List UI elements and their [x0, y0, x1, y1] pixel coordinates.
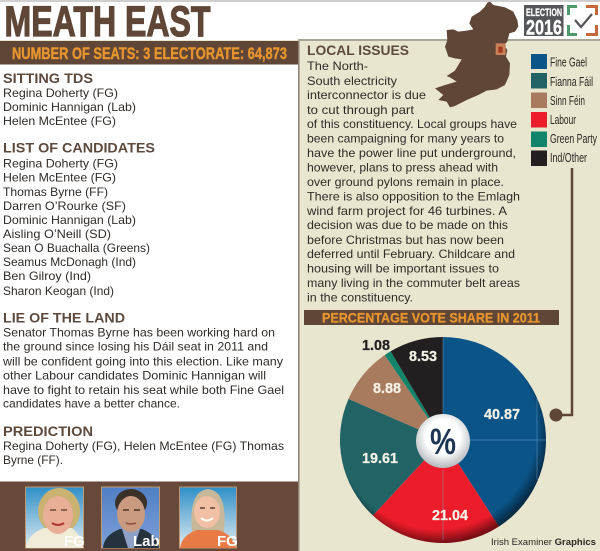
photo: Regina Doherty: FG	[64, 533, 85, 550]
prediction	[3, 424, 284, 467]
local issues: to cut through part	[307, 103, 415, 117]
list of candidates: Aisling O’Neill (SD)	[3, 227, 111, 241]
lie of the land: other Labour candidates Dominic Hannigan will	[3, 368, 266, 382]
local issues: before Christmas but has now been	[307, 233, 504, 247]
pie value labels: 40.87	[484, 407, 520, 423]
lie of the land: Senator Thomas Byrne has been working hard on	[3, 326, 275, 340]
sitting TDs: SITTING TDS	[3, 71, 93, 86]
local issues: LOCAL ISSUES	[307, 43, 409, 58]
local issues: decision was due to be made on this	[307, 218, 508, 232]
top white header strip	[0, 0, 600, 40]
local issues: interconnector is due	[307, 88, 426, 102]
local issues	[306, 43, 520, 305]
local issues: There is also opposition to the Emlagh	[307, 190, 520, 204]
credit: Irish Examiner Graphics	[491, 537, 596, 548]
logo: Election 2016: 2016	[526, 16, 562, 40]
local issues: many living in the commuter belt areas	[307, 276, 520, 290]
seats and electorate bar: NUMBER OF SEATS: 3 ELECTORATE: 64,873	[12, 45, 287, 63]
local issues: South electricity	[307, 74, 397, 88]
local issues: The North-	[307, 59, 368, 73]
logo: Election 2016: ELECTION	[526, 7, 562, 19]
photo strip	[0, 482, 298, 551]
lie of the land: have to fight to retain his seat while both Fine Gael	[3, 383, 284, 397]
local issues: been campaigning for many years to	[307, 132, 504, 146]
photo: Helen McEntee	[180, 487, 238, 550]
pie value labels: 19.61	[362, 451, 398, 467]
lie of the land: candidates have a better chance.	[3, 397, 180, 411]
photo: Dominic Hannigan: Lab	[133, 533, 160, 550]
sitting TDs: Helen McEntee (FG)	[3, 114, 116, 128]
list of candidates	[3, 140, 155, 298]
pie value labels	[362, 338, 520, 524]
list of candidates: LIST OF CANDIDATES	[3, 140, 155, 156]
list of candidates: Thomas Byrne (FF)	[3, 185, 108, 199]
pie centre percent badge	[416, 414, 470, 468]
local issues: deferred until February. Childcare and	[307, 247, 515, 261]
legend	[531, 54, 597, 166]
icon: map of Ireland	[435, 2, 518, 107]
legend connector line	[550, 168, 572, 422]
photo: Dominic Hannigan	[102, 487, 160, 550]
prediction: Byrne (FF).	[3, 453, 63, 467]
lie of the land: LIE OF THE LAND	[3, 311, 125, 326]
prediction: Regina Doherty (FG), Helen McEntee (FG) Thomas	[3, 439, 284, 453]
pie value labels: 1.08	[362, 338, 390, 354]
local issues: wind farm project for 46 turbines. A	[306, 204, 507, 218]
pie centre percent badge: %	[430, 421, 456, 462]
list of candidates: Sean O Buachalla (Greens)	[3, 241, 150, 255]
vote share heading bar: PERCENTAGE VOTE SHARE IN 2011	[322, 310, 540, 326]
local issues: in the constituency.	[307, 291, 413, 305]
local issues: over ground pylons remain in place.	[307, 175, 504, 189]
list of candidates: Darren O’Rourke (SF)	[3, 199, 126, 213]
left white panel	[0, 64, 298, 482]
lie of the land: the ground since losing his Dáil seat in 2011 and	[3, 340, 268, 354]
legend: Labour	[550, 112, 576, 127]
pie value labels: 21.04	[432, 508, 468, 524]
list of candidates: Seamus McDonagh (Ind)	[3, 255, 136, 269]
pie value labels: 8.88	[373, 381, 401, 397]
local issues: of this constituency. Local groups have	[307, 117, 517, 131]
local issues: have the power line put underground,	[307, 146, 516, 160]
prediction: PREDICTION	[3, 424, 93, 439]
list of candidates: Dominic Hannigan (Lab)	[3, 213, 136, 227]
list of candidates: Regina Doherty (FG)	[3, 156, 118, 170]
pie value labels: 8.53	[409, 349, 437, 365]
list of candidates: Ben Gilroy (Ind)	[3, 269, 91, 283]
list of candidates: Helen McEntee (FG)	[3, 170, 116, 184]
sitting TDs: Regina Doherty (FG)	[3, 86, 118, 100]
photo: Helen McEntee: FG	[217, 533, 238, 550]
seats and electorate bar	[0, 41, 298, 64]
logo: Election 2016	[524, 5, 596, 40]
lie of the land	[2, 311, 284, 411]
photo: Regina Doherty	[26, 487, 85, 550]
sitting TDs	[3, 71, 136, 128]
sitting TDs: Dominic Hannigan (Lab)	[3, 100, 136, 114]
local issues: however, plans to press ahead with	[307, 161, 498, 175]
local issues: housing will be important issues to	[307, 262, 499, 276]
list of candidates: Sharon Keogan (Ind)	[3, 284, 114, 298]
pie chart	[340, 337, 546, 543]
lie of the land: will be confident going into this election. Like many	[2, 354, 283, 368]
